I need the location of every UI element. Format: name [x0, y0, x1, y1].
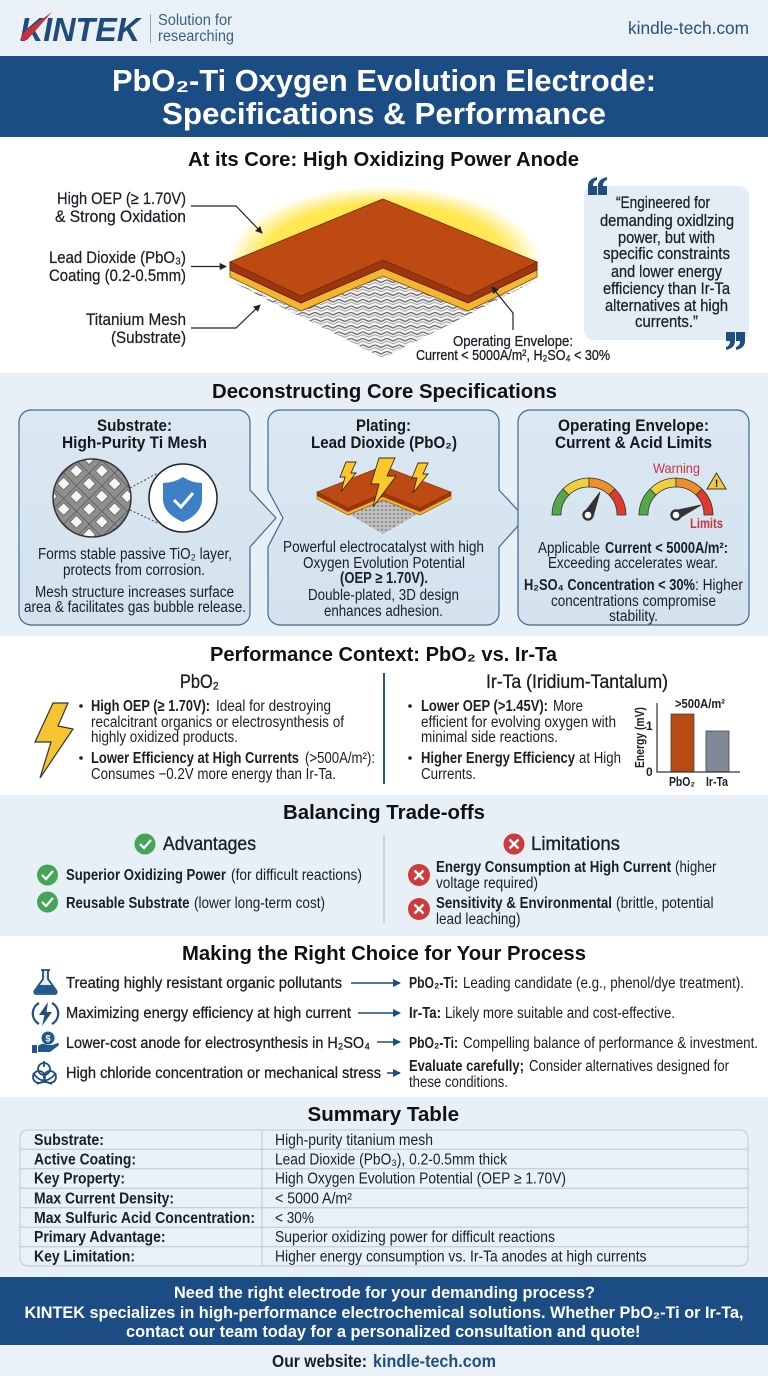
- row: high chloride: [33, 1058, 729, 1091]
- row: energy efficiency: Likely more suitable and cost-effective.: [445, 1005, 675, 1022]
- card: plating: Lead Dioxide (PbO₂): [311, 434, 457, 452]
- column: limitations: voltage required): [436, 875, 538, 892]
- card: substrate: [19, 410, 276, 625]
- footer website: Our website:: [272, 1351, 367, 1371]
- card: operating envelope: concentrations compromise: [551, 593, 716, 610]
- table: Primary Advantage:: [34, 1229, 166, 1246]
- table: Active Coating:: [34, 1151, 136, 1168]
- column: limitations: lead leaching): [436, 911, 520, 928]
- column: PbO2: Ideal for destroying: [216, 698, 331, 715]
- column: PbO2: PbO₂: [180, 671, 219, 693]
- heading: At its Core: High Oxidizing Power Anode: [188, 148, 579, 171]
- label: titanium mesh: Titanium Mesh: [86, 310, 186, 329]
- table: < 5000 A/m²: [275, 1190, 352, 1207]
- heading: Deconstructing Core Specifications: [212, 380, 557, 403]
- card: plating: Powerful electrocatalyst with high: [283, 539, 484, 556]
- card: plating: enhances adhesion.: [324, 603, 443, 620]
- table: High Oxygen Evolution Potential (OEP ≥ 1.70V): [275, 1171, 566, 1188]
- card: operating envelope: [518, 410, 749, 625]
- gauge: acid with warning: Warning: [653, 460, 700, 476]
- quote callout: demanding oxidlzing: [600, 212, 734, 230]
- call to action banner: contact our team today for a personalized consultation and quote!: [126, 1322, 640, 1341]
- icon: biohazard: [33, 1061, 56, 1084]
- label: high OEP: & Strong Oxidation: [55, 207, 186, 226]
- label: titanium mesh: (Substrate): [111, 328, 186, 347]
- card: operating envelope: Current & Acid Limits: [555, 434, 712, 452]
- card: plating: Oxygen Evolution Potential: [303, 555, 465, 572]
- label: lead dioxide coating: Coating (0.2-0.5mm): [49, 266, 186, 285]
- card: plating: Double-plated, 3D design: [308, 587, 459, 604]
- bar chart: energy: 1: [646, 719, 653, 733]
- row: organic pollutants: Treating highly resistant organic pollutants: [66, 975, 342, 992]
- row: high chloride: these conditions.: [409, 1074, 508, 1091]
- column: PbO2: [35, 671, 375, 783]
- row: high chloride: High chloride concentration or mechanical stress: [66, 1065, 381, 1082]
- card: substrate: Substrate:: [97, 417, 172, 435]
- column: limitations: [408, 833, 716, 928]
- bar chart: energy: [633, 696, 740, 789]
- column: PbO2: highly oxidized products.: [91, 729, 238, 746]
- table: Substrate:: [34, 1132, 104, 1149]
- card: plating: (OEP ≥ 1.70V).: [340, 570, 428, 587]
- table: Key Property:: [34, 1171, 125, 1188]
- footer website: [0, 1345, 768, 1376]
- quote callout: specific constraints: [603, 245, 730, 263]
- panel: right choice: [0, 936, 768, 1097]
- column: limitations: Energy Consumption at High Current: [436, 859, 671, 876]
- row: energy efficiency: Ir-Ta:: [409, 1005, 441, 1022]
- column: Ir-Ta: Ir-Ta (Iridium-Tantalum): [486, 671, 668, 693]
- label: lead dioxide coating: [49, 248, 226, 285]
- label: high OEP: High OEP (≥ 1.70V): [57, 189, 186, 208]
- label: titanium mesh: [86, 305, 260, 347]
- heading: Making the Right Choice for Your Process: [182, 942, 586, 965]
- column: Ir-Ta: Lower OEP (>1.45V):: [421, 698, 548, 715]
- card: operating envelope: : Higher: [695, 577, 743, 594]
- panel: core anode: [0, 137, 768, 373]
- row: energy efficiency: [33, 1002, 675, 1026]
- heading: Summary Table: [308, 1103, 459, 1126]
- row: lower cost anode: PbO₂-Ti:: [409, 1035, 458, 1052]
- icon: flask: [34, 970, 57, 994]
- table: < 30%: [275, 1210, 314, 1227]
- header bar: [0, 0, 768, 56]
- card: substrate: protects from corrosion.: [63, 562, 205, 579]
- gauge: acid with warning: Limits: [690, 516, 723, 531]
- card: operating envelope: Operating Envelope:: [558, 417, 709, 435]
- quote callout: currents.”: [635, 313, 698, 331]
- card: operating envelope: Applicable: [538, 540, 600, 557]
- table: [20, 1130, 748, 1266]
- column: advantages: Superior Oxidizing Power: [66, 867, 226, 884]
- logo: researching: [158, 28, 234, 45]
- card: substrate: area & facilitates gas bubble release.: [24, 599, 246, 616]
- quote callout: efficiency than Ir-Ta: [603, 280, 731, 298]
- card: plating: Plating:: [356, 417, 411, 435]
- heading: Performance Context: PbO₂ vs. Ir-Ta: [210, 643, 558, 666]
- column: limitations: (higher: [675, 859, 716, 876]
- row: energy efficiency: Maximizing energy efficiency at high current: [66, 1005, 352, 1022]
- column: Ir-Ta: [408, 671, 668, 783]
- column: advantages: Advantages: [163, 833, 256, 855]
- row: high chloride: Consider alternatives designed for: [529, 1058, 729, 1075]
- card: operating envelope: stability.: [609, 608, 658, 625]
- column: PbO2: High OEP (≥ 1.70V):: [91, 698, 210, 715]
- label: operating envelope: [416, 287, 610, 364]
- quote callout: and lower energy: [611, 263, 723, 281]
- row: lower cost anode: Lower-cost anode for electrosynthesis in H₂SO₄: [66, 1035, 370, 1052]
- icon: bolt in circle: [33, 1002, 58, 1026]
- bar chart: energy: >500A/m²: [675, 696, 726, 711]
- row: lower cost anode: [32, 1032, 758, 1053]
- gauge: acid with warning: !: [715, 478, 718, 490]
- quote callout: power, but with: [618, 229, 715, 247]
- logo: [20, 11, 234, 48]
- column: advantages: Reusable Substrate: [66, 895, 190, 912]
- column: Ir-Ta: Higher Energy Efficiency: [421, 750, 575, 767]
- bar chart: energy: Ir-Ta: [706, 775, 729, 789]
- table: Max Sulfuric Acid Concentration:: [34, 1210, 255, 1227]
- card: operating envelope: H₂SO₄ Concentration < 30%: [524, 577, 695, 594]
- panel: core specifications: [0, 373, 768, 636]
- label: operating envelope: Current < 5000A/m², H₂SO₄ < 30%: [416, 347, 610, 364]
- illustration: plated electrode with bolts: [317, 458, 451, 534]
- icon: mesh magnifier and shield: [53, 459, 217, 537]
- bar chart: energy: Energy (mV): [633, 707, 647, 768]
- column: Ir-Ta: Currents.: [421, 766, 476, 783]
- bar chart: energy: PbO₂: [669, 775, 695, 789]
- quote callout: alternatives at high: [605, 297, 728, 315]
- row: organic pollutants: PbO₂-Ti:: [409, 975, 458, 992]
- table: Max Current Density:: [34, 1190, 174, 1207]
- card: substrate: High-Purity Ti Mesh: [62, 434, 207, 452]
- table: Higher energy consumption vs. Ir-Ta anodes at high currents: [275, 1249, 647, 1266]
- quote callout: [584, 177, 749, 350]
- quote callout: “Engineered for: [616, 194, 710, 212]
- card: plating: [268, 410, 525, 625]
- row: high chloride: Evaluate carefully;: [409, 1058, 524, 1075]
- call to action banner: Need the right electrode for your demanding process?: [174, 1283, 595, 1302]
- row: organic pollutants: [34, 970, 744, 994]
- card: substrate: Forms stable passive TiO₂ layer,: [38, 546, 232, 563]
- label: high OEP: [55, 189, 262, 233]
- electrode illustration: [220, 186, 550, 358]
- column: limitations: Limitations: [531, 833, 620, 855]
- column: PbO2: (>500A/m²):: [305, 750, 375, 767]
- panel: performance context: [0, 636, 768, 795]
- table: Key Limitation:: [34, 1249, 135, 1266]
- gauge: current: [552, 478, 626, 520]
- column: advantages: (lower long-term cost): [194, 895, 325, 912]
- heading: Balancing Trade-offs: [283, 801, 485, 824]
- column: PbO2: Lower Efficiency at High Currents: [91, 750, 299, 767]
- table: Superior oxidizing power for difficult reactions: [275, 1229, 555, 1246]
- icon: hand with coin: [32, 1032, 59, 1053]
- column: limitations: (brittle, potential: [616, 895, 714, 912]
- logo: KINTEK: [20, 11, 142, 48]
- panel: trade-offs: [0, 795, 768, 936]
- call to action banner: [0, 1277, 768, 1345]
- table: High-purity titanium mesh: [275, 1132, 433, 1149]
- footer website: kindle-tech.com: [373, 1351, 496, 1371]
- column: advantages: [37, 833, 362, 912]
- icon: hand with coin: $: [46, 1034, 51, 1044]
- column: limitations: Sensitivity & Environmental: [436, 895, 612, 912]
- label: lead dioxide coating: Lead Dioxide (PbO₃): [49, 248, 186, 267]
- column: PbO2: recalcitrant organics or electrosynthesis of: [91, 714, 345, 731]
- column: advantages: (for difficult reactions): [231, 867, 362, 884]
- card: substrate: Mesh structure increases surface: [35, 584, 234, 601]
- call to action banner: KINTEK specializes in high-performance electrochemical solutions. Whether PbO₂-Ti or Ir-Ta,: [24, 1303, 744, 1322]
- bar chart: energy: 0: [646, 765, 653, 779]
- card: operating envelope: Exceeding accelerates wear.: [548, 555, 718, 572]
- title banner: PbO₂-Ti Oxygen Evolution Electrode:: [112, 63, 656, 98]
- column: Ir-Ta: More: [553, 698, 583, 715]
- title banner: [0, 56, 768, 137]
- panel: summary table: [0, 1097, 768, 1277]
- card: operating envelope: Current < 5000A/m²:: [605, 540, 728, 557]
- column: Ir-Ta: efficient for evolving oxygen with: [421, 714, 616, 731]
- table: Lead Dioxide (PbO₃), 0.2-0.5mm thick: [275, 1151, 507, 1168]
- gauge: acid with warning: [639, 460, 726, 531]
- logo: Solution for: [158, 12, 232, 29]
- label: operating envelope: Operating Envelope:: [453, 333, 573, 350]
- title banner: Specifications & Performance: [162, 96, 606, 131]
- column: Ir-Ta: at High: [579, 750, 621, 767]
- column: PbO2: Consumes −0.2V more energy than Ir-Ta.: [91, 766, 336, 783]
- icon: lightning bolt: [35, 703, 73, 778]
- column: Ir-Ta: minimal side reactions.: [421, 729, 558, 746]
- website link: kindle-tech.com: [628, 18, 749, 38]
